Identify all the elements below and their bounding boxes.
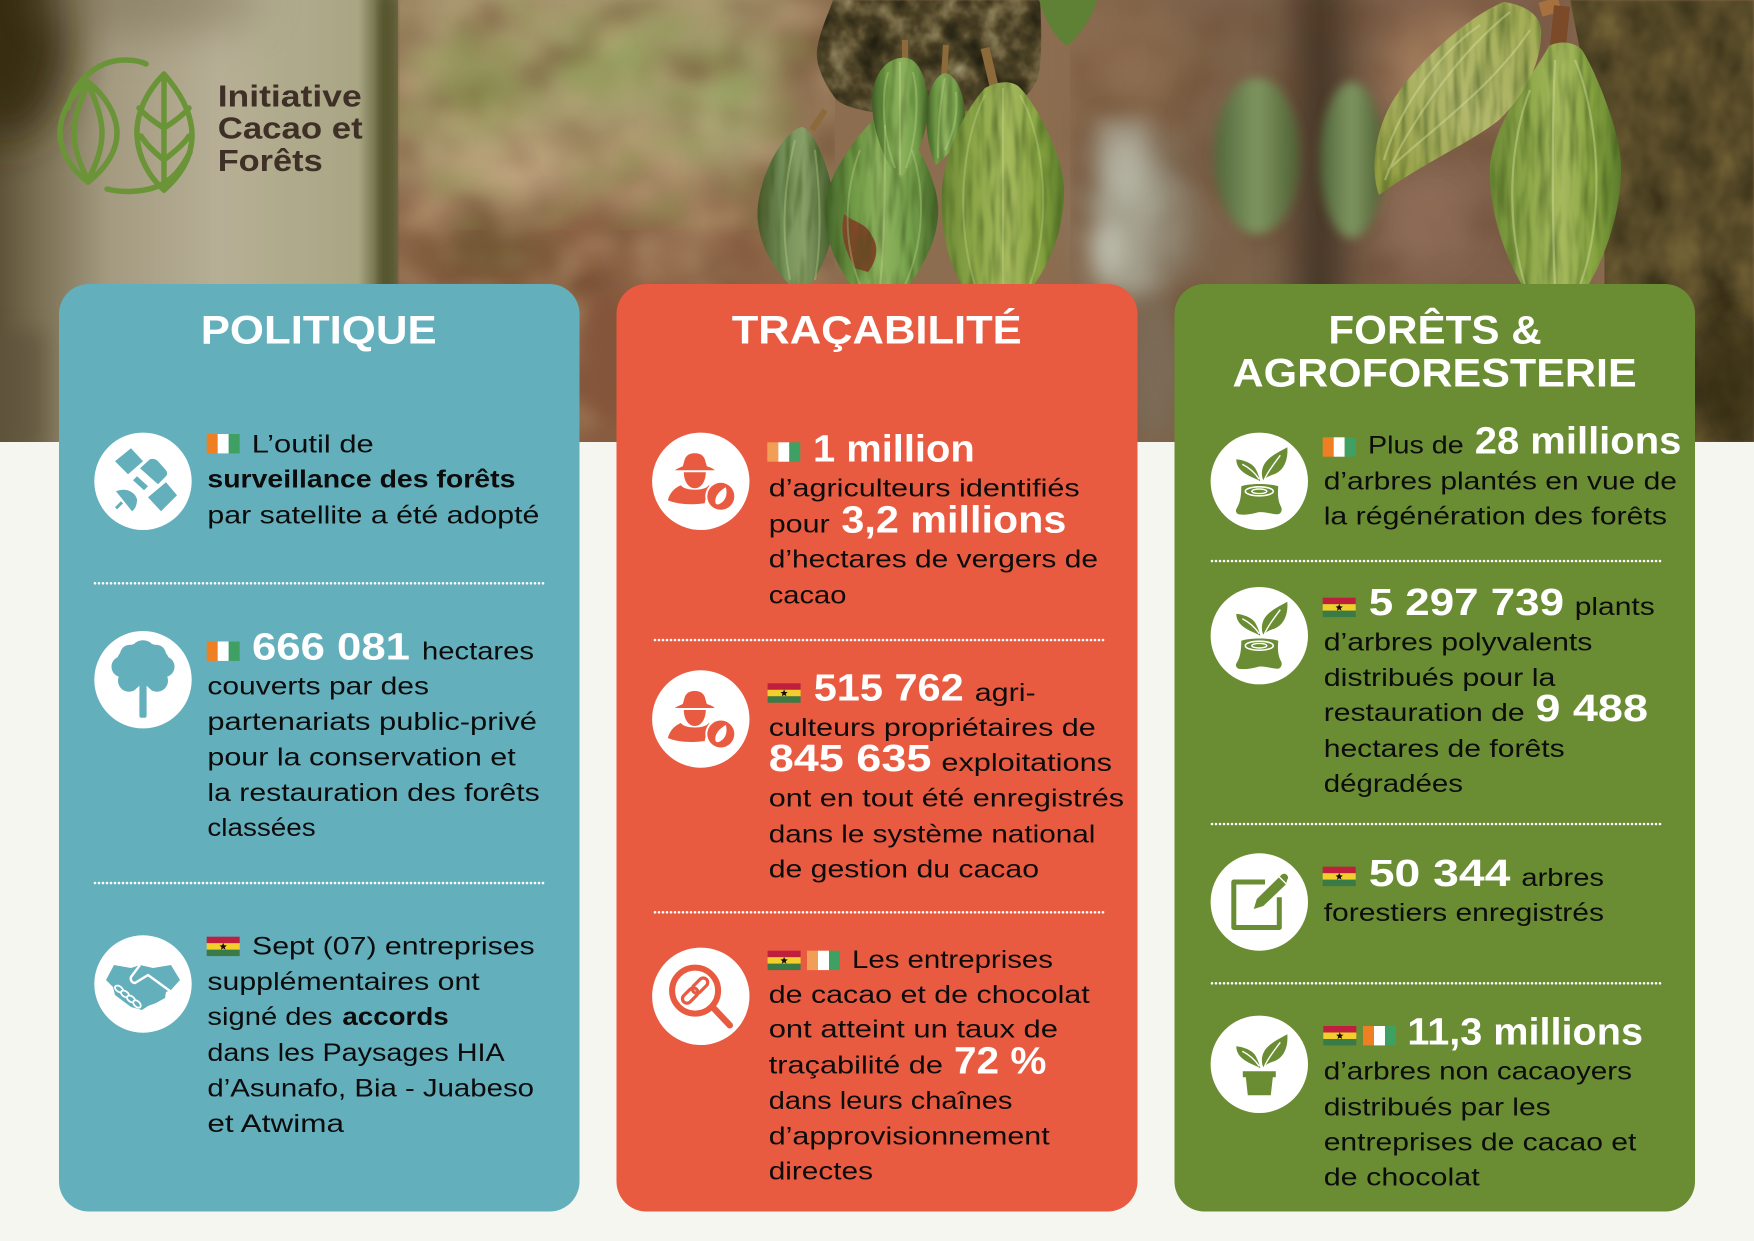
item text: 11,3 millions — [1407, 1011, 1643, 1053]
item text — [1324, 1011, 1643, 1192]
flags: Ghana and Côte d'Ivoire — [1323, 1026, 1396, 1045]
icon: handshake — [94, 935, 192, 1033]
item text: de cacao et de chocolat — [769, 981, 1090, 1009]
heading: POLITIQUE — [201, 308, 437, 352]
item text: couverts par des — [207, 672, 429, 700]
item: 11,3 millions — [1211, 1011, 1643, 1192]
icon: farmer — [652, 670, 750, 768]
logo wordmark — [218, 79, 363, 178]
item text: 1 million — [813, 429, 975, 471]
item text — [207, 626, 540, 842]
left tree trunk — [0, 0, 398, 452]
item text: classées — [207, 814, 316, 842]
item text: signé des — [207, 1003, 332, 1031]
panel background — [1174, 284, 1695, 1212]
flags: Ghana and Côte d'Ivoire — [768, 951, 840, 970]
item text: 50 344 — [1369, 853, 1510, 895]
item text: dans les Paysages HIA — [207, 1039, 505, 1067]
flag: Côte d'Ivoire — [767, 442, 800, 462]
top hanging pod — [1039, 0, 1097, 46]
item text: 3,2 millions — [841, 499, 1066, 541]
item text: d’approvisionnement — [769, 1122, 1050, 1150]
item text: la régénération des forêts — [1324, 503, 1667, 531]
item text: pour la conservation et — [207, 743, 516, 771]
item text: agri- — [975, 679, 1036, 707]
flag: Côte d'Ivoire — [207, 642, 240, 661]
blurred background pods — [1214, 78, 1384, 238]
cocoa pods cluster — [757, 58, 1064, 290]
item: 515 762 — [652, 668, 1124, 884]
item text: dégradées — [1324, 770, 1463, 798]
icon: notepad and pencil — [1211, 853, 1308, 951]
item text: d’arbres polyvalents — [1324, 628, 1592, 656]
item: 28 millions — [1211, 420, 1681, 531]
flag: Côte d'Ivoire — [1323, 437, 1356, 457]
item text: cacao — [769, 581, 846, 609]
item text: entreprises de cacao et — [1324, 1128, 1636, 1156]
item text: la restauration des forêts — [207, 779, 540, 807]
panel background — [616, 284, 1138, 1212]
item text: dans leurs chaînes — [769, 1087, 1012, 1115]
item text — [769, 946, 1090, 1185]
item text — [1324, 582, 1655, 798]
item text: culteurs propriétaires de — [769, 714, 1096, 742]
item text: plants — [1575, 593, 1655, 621]
icon: farmer — [652, 433, 750, 530]
icon: sapling on stump — [1211, 587, 1308, 684]
item text: arbres — [1521, 864, 1604, 892]
item text: hectares — [422, 637, 534, 665]
item: 1 million — [652, 429, 1098, 609]
heading: FORÊTS & — [1328, 308, 1542, 352]
item text: supplémentaires ont — [207, 968, 480, 996]
item text: traçabilité de — [769, 1051, 943, 1079]
item text: 515 762 — [814, 668, 964, 710]
item text: d’Asunafo, Bia - Juabeso — [207, 1075, 534, 1103]
item text: L’outil de — [252, 431, 374, 459]
item text: pour — [769, 510, 830, 538]
flag: Côte d'Ivoire — [207, 434, 240, 453]
item: 666 081 hectares — [94, 626, 540, 842]
item text: 9 488 — [1535, 688, 1648, 730]
right tree bark — [1570, 0, 1754, 450]
item text — [1324, 420, 1681, 531]
item text — [769, 429, 1098, 609]
logo wordmark: Initiative — [218, 79, 362, 114]
item text: d’arbres non cacaoyers — [1324, 1057, 1632, 1085]
item text: Les entreprises — [852, 946, 1053, 974]
flag: Ghana — [207, 937, 240, 956]
pod stems — [812, 0, 1562, 130]
item text: 666 081 — [252, 626, 410, 668]
item text: surveillance des forêts — [207, 465, 515, 493]
item text: partenariats public-privé — [207, 708, 537, 736]
icon: sapling on stump — [1211, 433, 1308, 530]
item text: d’hectares de vergers de — [769, 546, 1098, 574]
item text: ont en tout été enregistrés — [769, 785, 1124, 813]
panel: forêts et agroforesterie — [1174, 284, 1695, 1212]
panel background — [59, 284, 580, 1212]
item text: distribués pour la — [1324, 664, 1556, 692]
flag: Ghana — [1323, 598, 1356, 617]
item text — [207, 431, 539, 529]
item: taux de traçabilité — [652, 946, 1090, 1185]
heading: TRAÇABILITÉ — [732, 308, 1022, 352]
icon: magnifier with chain link — [652, 948, 750, 1045]
item text: d’agriculteurs identifiés — [769, 475, 1080, 503]
icon: potted sapling — [1211, 1016, 1308, 1113]
item: sept entreprises — [94, 932, 535, 1138]
item text: accords — [342, 1003, 449, 1031]
hero photo: cocoa pods on trees — [0, 0, 1754, 480]
logo emblem — [60, 60, 192, 191]
item text: forestiers enregistrés — [1324, 899, 1604, 927]
item text: 5 297 739 — [1369, 582, 1564, 624]
item text — [207, 932, 535, 1138]
item text: de chocolat — [1324, 1164, 1480, 1192]
item text: de gestion du cacao — [769, 856, 1039, 884]
item text: 845 635 — [769, 738, 931, 780]
logo wordmark: Forêts — [218, 143, 323, 178]
icon: tree — [94, 631, 192, 728]
pod ribs — [785, 62, 1043, 285]
central trunk with bark — [817, 0, 1041, 118]
panel: traçabilité — [616, 284, 1138, 1212]
item text: ont atteint un taux de — [769, 1016, 1058, 1044]
item text: restauration de — [1324, 699, 1525, 727]
heading: AGROFORESTERIE — [1233, 352, 1637, 396]
icon: satellite — [94, 433, 192, 530]
right cocoa pods — [1374, 2, 1621, 290]
item text: dans le système national — [769, 820, 1095, 848]
item text: et Atwima — [207, 1110, 344, 1138]
flag: Ghana — [768, 683, 801, 703]
item text: 28 millions — [1475, 420, 1681, 462]
logo wordmark: Cacao et — [218, 110, 363, 145]
item text: directes — [769, 1157, 873, 1185]
item text: Plus de — [1368, 431, 1464, 459]
item: outil de surveillance — [94, 431, 539, 530]
item text — [1324, 853, 1604, 927]
panel: politique — [59, 284, 580, 1212]
flag: Ghana — [1323, 867, 1356, 886]
mottled leaf litter — [399, 0, 1498, 430]
item text: par satellite a été adopté — [207, 501, 539, 529]
item text: distribués par les — [1324, 1093, 1551, 1121]
item text: d’arbres plantés en vue de — [1324, 467, 1677, 495]
heading — [1232, 308, 1637, 396]
item text: 72 % — [954, 1040, 1046, 1082]
item text: exploitations — [941, 749, 1112, 777]
logo: Initiative Cacao et Forêts — [60, 60, 363, 191]
item: 5 297 739 — [1211, 582, 1655, 798]
item text: Sept (07) entreprises — [252, 932, 535, 960]
item text — [769, 668, 1124, 884]
item: 50 344 — [1211, 853, 1604, 951]
item text: hectares de forêts — [1324, 735, 1565, 763]
